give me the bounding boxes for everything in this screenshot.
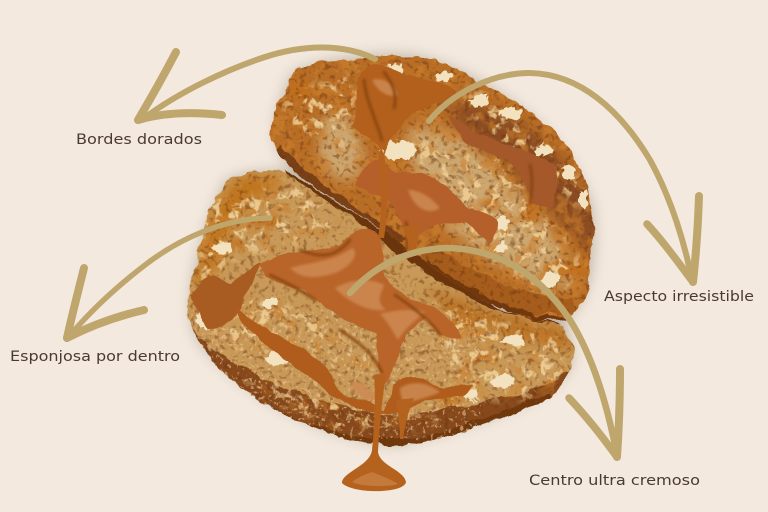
- bottom cookie half: [180, 165, 580, 450]
- arrow: Aspecto irresistible: [429, 73, 699, 282]
- top cookie brown lower rim: [276, 150, 400, 243]
- bottom cookie darkest underside: [240, 395, 550, 444]
- bottom cookie pale crumbs: [194, 177, 572, 440]
- label: Bordes dorados: Bordes dorados: [76, 132, 202, 148]
- caramel highlights: [290, 79, 440, 406]
- top cookie tan interior: [320, 116, 575, 287]
- top cookie pale flakes: [380, 64, 588, 287]
- bottom cookie rim specks: [180, 310, 480, 440]
- label: Esponjosa por dentro: Esponjosa por dentro: [10, 349, 180, 365]
- caramel: centre of top half: [355, 160, 498, 243]
- caramel: bottom half main flow: [258, 230, 462, 385]
- bottom cookie dark grain: [180, 165, 580, 450]
- caramel: upper pour: [350, 65, 457, 164]
- caramel drip and pool: [342, 146, 419, 491]
- bottom cookie pale flakes: [195, 241, 524, 400]
- top cookie half: [260, 50, 600, 330]
- top cookie dark caramel right side: [445, 105, 600, 255]
- bottom cookie orange crust upper: [195, 175, 285, 290]
- arrow: Centro ultra cremoso: [350, 248, 620, 457]
- bottom cookie orange caramel patches: [223, 216, 489, 405]
- top cookie orange lower right patches: [288, 80, 587, 280]
- label: Centro ultra cremoso: Centro ultra cremoso: [529, 473, 700, 489]
- label: Aspecto irresistible: Aspecto irresistible: [604, 289, 754, 305]
- caramel dark folds: [270, 72, 532, 372]
- top cookie gold mottling: [270, 54, 593, 316]
- bottom cookie dark rim: [191, 326, 570, 448]
- caramel: left arm: [190, 262, 260, 330]
- bottom cookie gold mottling: [192, 180, 566, 433]
- seam between halves: [285, 170, 560, 330]
- top cookie pale crumbs: [282, 66, 588, 298]
- arrow: Bordes dorados: [138, 47, 375, 120]
- caramel: right streak: [447, 116, 557, 208]
- caramel filling: [190, 65, 557, 491]
- cookie shadow: [191, 54, 594, 445]
- arrow: Esponjosa por dentro: [67, 218, 270, 338]
- top cookie dark grain: [260, 50, 600, 330]
- caramel: lower streaks: [232, 308, 474, 413]
